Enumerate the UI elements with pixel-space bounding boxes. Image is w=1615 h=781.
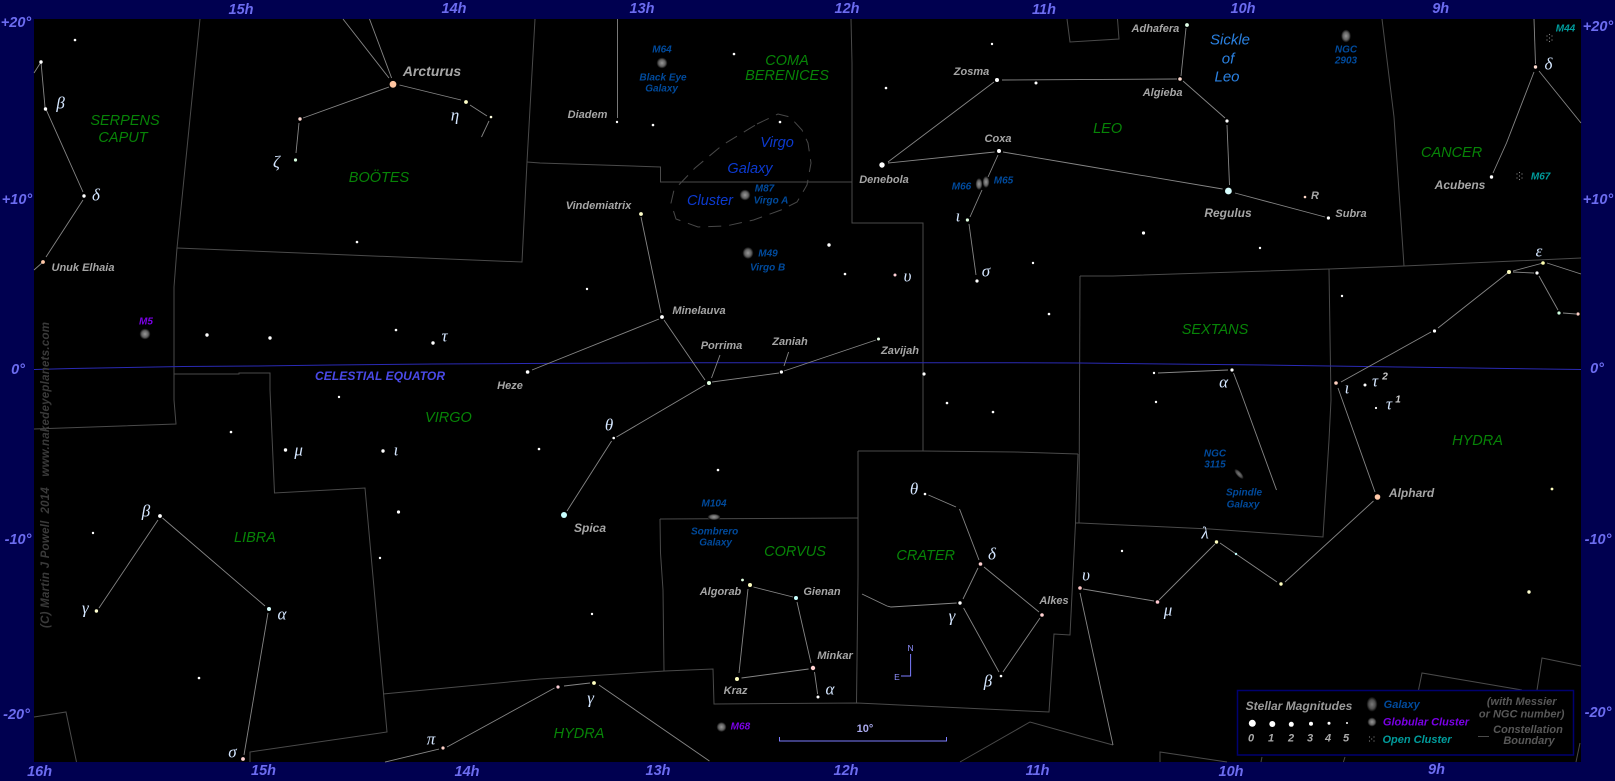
constellation: Leo: Adhafera xyxy=(1131,23,1179,35)
constellation: Leo: σ xyxy=(982,262,991,280)
constellation: Leo: Zosma xyxy=(953,66,989,78)
legend: deep-sky object types xyxy=(1366,697,1470,746)
right declination axis: -20° xyxy=(1585,705,1612,721)
bottom right-ascension axis: 11h xyxy=(1026,763,1050,779)
constellation: Cancer: CANCER xyxy=(1421,145,1483,161)
constellation: Hydra (head and body): ε xyxy=(1536,242,1543,260)
galaxy NGC 3115 Spindle: NGC xyxy=(1204,448,1227,460)
constellation: Libra: β xyxy=(141,502,151,520)
constellation: Leo: Algieba xyxy=(1142,87,1182,99)
right declination axis: 0° xyxy=(1590,361,1604,377)
legend: stellar magnitudes: 2 xyxy=(1287,733,1294,745)
constellation: Leo: ι xyxy=(956,206,961,226)
constellation: Boötes: η xyxy=(451,106,459,124)
Virgo Galaxy Cluster outline and label: Virgo xyxy=(760,135,794,151)
top right-ascension axis xyxy=(228,1,1449,18)
constellation: Corvus: CORVUS xyxy=(764,544,826,560)
open cluster M67: M67 xyxy=(1531,172,1551,182)
Diadem star and Coma Berenices label: BERENICES xyxy=(745,68,829,84)
top right-ascension axis: 14h xyxy=(442,1,467,17)
constellation: Crater: CRATER xyxy=(896,548,955,564)
top right-ascension axis: 9h xyxy=(1432,1,1449,17)
top right-ascension axis: 13h xyxy=(630,1,655,17)
constellation: Crater: Alkes xyxy=(1038,595,1069,607)
galaxies M65 and M66: M65 xyxy=(994,176,1014,186)
left declination axis: 0° xyxy=(11,362,25,378)
constellation: Cancer: Acubens xyxy=(1434,178,1486,192)
compass: north and east: N xyxy=(908,643,914,653)
bottom right-ascension axis: 16h xyxy=(27,764,52,780)
galaxy M104 Sombrero: Galaxy xyxy=(699,538,732,548)
copyright watermark: (C) Martin J Powell 2014 www.nakedeyeplanets.com xyxy=(40,322,52,628)
constellation: Hydra (head and body) xyxy=(1078,242,1581,745)
legend: stellar magnitudes: 5 xyxy=(1343,733,1350,745)
constellation: Hydra (tail) xyxy=(385,681,709,762)
constellation: Libra: γ xyxy=(82,598,90,618)
legend: deep-sky object types: Globular Cluster xyxy=(1383,717,1470,729)
constellation: Hydra (head and body): 1 xyxy=(1395,394,1401,406)
left declination axis: +20° xyxy=(1,15,31,31)
constellation: Virgo: Porrima xyxy=(701,340,742,352)
legend: notes and boundary key: or NGC number) xyxy=(1479,709,1565,721)
constellation: Virgo: VIRGO xyxy=(425,410,472,426)
galaxy M49 Virgo B: Virgo B xyxy=(750,262,785,274)
background field stars xyxy=(74,39,1553,679)
galaxy M64 Black Eye xyxy=(639,44,687,94)
constellation: Crater: β xyxy=(983,672,993,690)
celestial equator line xyxy=(34,363,1581,370)
Diadem star and Coma Berenices label: COMA xyxy=(765,53,809,69)
constellation: Cancer xyxy=(1421,19,1581,192)
constellation: Hydra (head and body): 2 xyxy=(1381,372,1388,382)
left declination axis xyxy=(1,15,32,723)
open cluster M44: M44 xyxy=(1556,24,1576,34)
Diadem star and Coma Berenices label xyxy=(568,19,829,123)
constellation: Virgo: Spica xyxy=(574,521,606,535)
constellation: Leo: Regulus xyxy=(1204,206,1252,220)
Virgo Galaxy Cluster outline and label: Galaxy xyxy=(727,161,773,177)
constellation: Sextans: α xyxy=(1219,372,1229,392)
asterism label: Sickle of Leo xyxy=(1210,32,1250,86)
bottom right-ascension axis: 9h xyxy=(1428,762,1445,778)
constellation: Crater: γ xyxy=(949,606,957,626)
galaxy M49 Virgo B: M49 xyxy=(758,248,778,260)
constellation: Virgo: ι xyxy=(394,440,399,460)
constellation: Corvus xyxy=(699,544,853,698)
galaxy NGC 3115 Spindle: Spindle xyxy=(1226,488,1262,498)
scale bar: 10 degrees: 10° xyxy=(857,723,873,735)
constellation: Virgo xyxy=(293,200,919,535)
constellation: Corvus: Kraz xyxy=(724,685,748,697)
constellation: Virgo: Vindemiatrix xyxy=(566,200,632,212)
constellation: Leo: Subra xyxy=(1335,208,1367,220)
bottom right-ascension axis: 12h xyxy=(834,763,859,779)
galaxy M104 Sombrero xyxy=(691,498,738,548)
galaxy NGC 2903 xyxy=(1334,30,1358,66)
galaxy M87 Virgo A: M87 xyxy=(755,184,775,194)
constellation: Hydra (head and body): HYDRA xyxy=(1452,433,1503,449)
galaxies M65 and M66: M66 xyxy=(952,182,972,192)
celestial equator label: CELESTIAL EQUATOR xyxy=(315,369,445,383)
legend panel xyxy=(1238,690,1574,755)
constellation: Leo: R xyxy=(1311,190,1319,202)
bottom right-ascension axis: 15h xyxy=(251,763,276,779)
constellation: Serpens Caput xyxy=(34,60,160,274)
constellation: Corvus: Algorab xyxy=(699,586,742,598)
galaxy NGC 2903: NGC xyxy=(1335,44,1358,56)
constellation: Serpens Caput: δ xyxy=(92,186,101,204)
left declination axis: -20° xyxy=(3,707,30,723)
legend: stellar magnitudes: Stellar Magnitudes xyxy=(1246,699,1353,713)
globular cluster M5 xyxy=(139,316,153,340)
galaxy M104 Sombrero: M104 xyxy=(701,498,727,510)
open cluster M44 xyxy=(1546,24,1576,42)
galaxy M87 Virgo A: Virgo A xyxy=(754,196,788,206)
scale bar: 10 degrees xyxy=(780,723,946,741)
constellation: Hydra (head and body): τ xyxy=(1386,394,1393,414)
galaxy NGC 2903: 2903 xyxy=(1334,56,1358,66)
asterism label: Sickle of Leo: Leo xyxy=(1214,68,1240,86)
legend: notes and boundary key: (with Messier xyxy=(1487,696,1557,708)
right declination axis: +20° xyxy=(1583,19,1613,35)
constellation: Hydra (head and body): υ xyxy=(1082,566,1090,584)
constellation: Virgo: Zavijah xyxy=(880,345,919,357)
galaxy M49 Virgo B xyxy=(742,247,785,274)
constellation: Hydra (tail): π xyxy=(427,730,436,748)
globular cluster M68 xyxy=(716,722,751,732)
constellation: Corvus: Gienan xyxy=(803,586,841,598)
legend: stellar magnitudes: 1 xyxy=(1268,733,1274,745)
constellation: Sextans xyxy=(1158,322,1276,490)
top right-ascension axis: 15h xyxy=(228,2,254,18)
legend: deep-sky object types: Open Cluster xyxy=(1382,734,1452,746)
legend: notes and boundary key xyxy=(1478,696,1565,747)
constellation: Boötes xyxy=(273,19,492,186)
left declination axis: -10° xyxy=(5,532,32,548)
compass: north and east: E xyxy=(894,672,900,682)
constellation: Crater: θ xyxy=(910,480,918,498)
legend: stellar magnitudes: 0 xyxy=(1248,733,1255,745)
constellation: Hydra (tail): γ xyxy=(587,688,595,708)
constellation: Virgo: Minelauva xyxy=(672,305,726,317)
constellation: Hydra (head and body): τ xyxy=(1372,372,1379,390)
constellation: Leo: Coxa xyxy=(985,133,1011,145)
constellation: Hydra (tail): HYDRA xyxy=(554,726,604,742)
left declination axis: +10° xyxy=(2,192,32,208)
constellation: Hydra (head and body): ι xyxy=(1345,378,1350,398)
constellation: Serpens Caput: β xyxy=(55,94,65,112)
Virgo Galaxy Cluster outline and label xyxy=(671,114,811,227)
legend: notes and boundary key: Constellation xyxy=(1493,724,1563,736)
constellation: Leo: Denebola xyxy=(859,174,909,186)
legend: stellar magnitudes: 4 xyxy=(1324,733,1331,745)
constellation: Libra: α xyxy=(278,604,288,624)
galaxy M104 Sombrero: Sombrero xyxy=(691,526,738,538)
constellation: Boötes: BOÖTES xyxy=(349,168,410,186)
constellation: Hydra (head and body): λ xyxy=(1200,524,1209,542)
galaxy M64 Black Eye: Galaxy xyxy=(645,84,678,94)
open cluster M67 xyxy=(1516,172,1551,182)
Diadem star and Coma Berenices label: Diadem xyxy=(568,109,608,121)
constellation: Virgo: θ xyxy=(605,416,613,434)
bottom right-ascension axis: 10h xyxy=(1218,764,1244,780)
constellation: Cancer: δ xyxy=(1545,54,1554,74)
compass: north and east xyxy=(894,643,914,682)
top right-ascension axis: 12h xyxy=(834,1,860,17)
constellation: Virgo: μ xyxy=(293,440,303,460)
right declination axis: +10° xyxy=(1583,192,1613,208)
constellation: Libra xyxy=(82,502,288,762)
constellation: Boötes: ζ xyxy=(273,152,281,172)
constellation: Serpens Caput: SERPENS xyxy=(90,113,160,129)
constellation: Virgo: Heze xyxy=(497,380,523,392)
right declination axis: -10° xyxy=(1585,532,1612,548)
constellation: Hydra (head and body): μ xyxy=(1163,600,1172,620)
galaxy M87 Virgo A xyxy=(740,184,788,206)
constellation: Serpens Caput: Unuk Elhaia xyxy=(52,262,114,274)
constellation: Corvus: Minkar xyxy=(817,650,853,662)
legend: stellar magnitudes: 3 xyxy=(1307,733,1313,745)
constellation: Boötes: Arcturus xyxy=(402,63,461,79)
bottom right-ascension axis: 14h xyxy=(454,764,480,780)
constellation: Libra: σ xyxy=(228,742,237,762)
galaxy M64 Black Eye: Black Eye xyxy=(639,72,687,84)
constellation: Virgo: υ xyxy=(904,266,912,286)
bottom right-ascension axis: 13h xyxy=(646,763,671,779)
constellation: Libra: LIBRA xyxy=(234,530,276,546)
legend: deep-sky object types: Galaxy xyxy=(1384,699,1421,711)
constellation: Leo: LEO xyxy=(1093,121,1122,137)
asterism label: Sickle of Leo: Sickle xyxy=(1210,32,1250,48)
constellation: Corvus: α xyxy=(826,680,836,698)
constellation: Crater: δ xyxy=(988,544,997,564)
constellation: Sextans: SEXTANS xyxy=(1182,322,1249,338)
legend: notes and boundary key: Boundary xyxy=(1503,735,1556,747)
right declination axis xyxy=(1583,19,1613,721)
globular cluster M5: M5 xyxy=(139,316,153,328)
constellation: Virgo: Zaniah xyxy=(771,336,808,348)
globular cluster M68: M68 xyxy=(731,722,751,732)
asterism label: Sickle of Leo: of xyxy=(1222,50,1236,68)
constellation: Hydra (head and body): Alphard xyxy=(1388,486,1435,500)
galaxy NGC 3115 Spindle: 3115 xyxy=(1204,460,1226,470)
constellation: Serpens Caput: CAPUT xyxy=(98,130,149,146)
bottom right-ascension axis xyxy=(27,762,1445,780)
label: tau Virginis: τ xyxy=(442,326,449,346)
constellation: Crater xyxy=(862,480,1069,690)
galaxy M64 Black Eye: M64 xyxy=(652,44,672,56)
legend: stellar magnitudes xyxy=(1246,699,1353,745)
galaxy NGC 3115 Spindle: Galaxy xyxy=(1227,500,1260,510)
Virgo Galaxy Cluster outline and label: Cluster xyxy=(687,193,734,209)
top right-ascension axis: 10h xyxy=(1230,1,1256,17)
galaxies M65 and M66 xyxy=(952,176,1014,192)
constellation: Leo xyxy=(859,23,1367,283)
galaxy NGC 3115 Spindle xyxy=(1204,448,1262,510)
top right-ascension axis: 11h xyxy=(1032,2,1056,18)
